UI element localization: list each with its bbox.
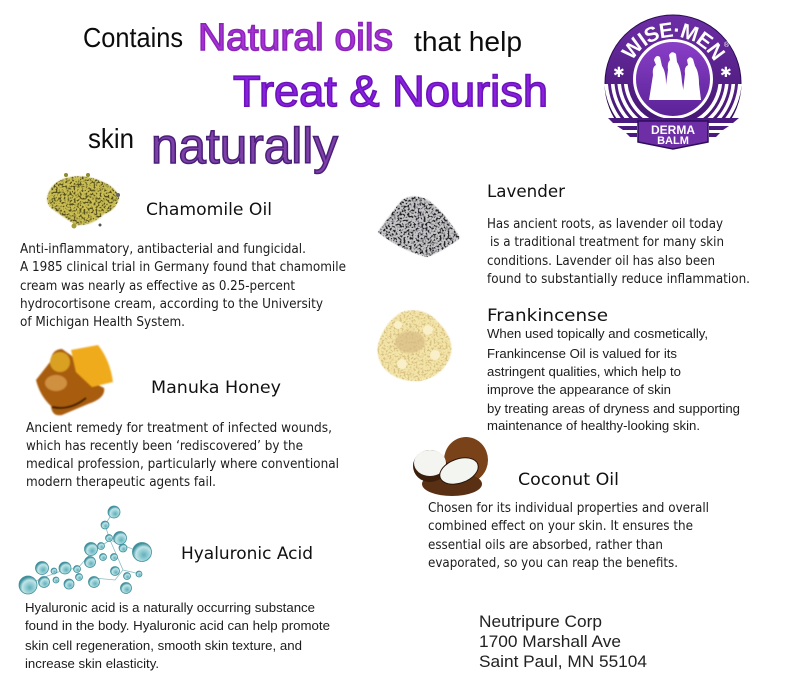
logo: Wise Men Derma Balm: ✱ xyxy=(720,65,732,81)
panel: lavender xyxy=(378,182,750,287)
text block: A 1985 clinical trial in Germany found that chamomile xyxy=(20,260,346,275)
text block: astringent qualities, which help to xyxy=(487,365,681,379)
panel: frankincense xyxy=(378,306,740,433)
text block: Has ancient roots, as lavender oil today xyxy=(487,217,723,232)
text block xyxy=(487,217,750,287)
heading: Frankincense xyxy=(487,306,608,326)
text block: When used topically and cosmetically, xyxy=(487,327,708,341)
address: 1700 Marshall Ave xyxy=(479,633,621,651)
text block: increase skin elasticity. xyxy=(25,657,159,671)
title: Natural oils xyxy=(198,17,393,59)
text block: Ancient remedy for treatment of infected wounds, xyxy=(26,421,332,436)
title: Treat & Nourish xyxy=(233,67,548,116)
text block: Hyaluronic acid is a naturally occurring substance xyxy=(25,601,315,615)
icon: molecule xyxy=(19,506,152,594)
icon: chamomile flowers xyxy=(47,173,120,228)
text block: of Michigan Health System. xyxy=(20,315,185,330)
text block xyxy=(20,242,346,330)
text block: essential oils are absorbed, rather than xyxy=(428,538,663,553)
text block: modern therapeutic agents fail. xyxy=(26,475,216,490)
title: that help xyxy=(414,26,522,57)
heading: Coconut Oil xyxy=(518,470,619,490)
address: Neutripure Corp xyxy=(479,613,602,631)
logo: Wise Men Derma Balm: ® xyxy=(724,41,730,49)
text block: Chosen for its individual properties and overall xyxy=(428,501,709,516)
panel: hyaluronic acid xyxy=(19,506,330,671)
icon: honeycomb xyxy=(36,345,113,415)
logo: Wise Men Derma Balm: ✱ xyxy=(613,65,625,81)
title: skin xyxy=(88,123,134,154)
text block: cream was nearly as effective as 0.25-percent xyxy=(20,279,295,294)
text block xyxy=(25,601,330,671)
panel: manuka honey xyxy=(26,345,339,490)
text block: medical profession, particularly where conventional xyxy=(26,457,339,472)
text block: maintenance of healthy-looking skin. xyxy=(487,419,700,433)
icon: lavender pile xyxy=(378,196,460,257)
text block: improve the appearance of skin xyxy=(487,383,671,397)
text block: found in the body. Hyaluronic acid can help promote xyxy=(25,619,330,633)
text block: conditions. Lavender oil has also been xyxy=(487,254,715,269)
panel: chamomile oil xyxy=(20,173,346,330)
address: Saint Paul, MN 55104 xyxy=(479,653,647,671)
logo: Wise Men Derma Balm: DERMA xyxy=(651,123,695,137)
text block xyxy=(26,421,339,490)
text block: which has recently been ‘rediscovered’ by the xyxy=(26,439,303,454)
heading: Hyaluronic Acid xyxy=(181,544,313,564)
panel: coconut oil xyxy=(413,437,709,571)
text block: skin cell regeneration, smooth skin texture, and xyxy=(25,639,302,653)
text block: evaporated, so you can reap the benefits. xyxy=(428,556,678,571)
icon: coconut xyxy=(413,437,488,496)
text block: Anti-inflammatory, antibacterial and fungicidal. xyxy=(20,242,306,257)
text block: by treating areas of dryness and supporting xyxy=(487,402,740,416)
title: Contains xyxy=(83,22,183,53)
heading: Lavender xyxy=(487,182,565,202)
logo: Wise Men Derma Balm: BALM xyxy=(657,135,689,147)
icon: frankincense resin xyxy=(378,310,451,381)
text block: Frankincense Oil is valued for its xyxy=(487,347,677,361)
text block xyxy=(487,327,740,433)
text block xyxy=(428,501,709,571)
address xyxy=(479,613,647,671)
heading: Manuka Honey xyxy=(151,378,281,398)
text block: found to substantially reduce inflammation. xyxy=(487,272,750,287)
logo: Wise Men Derma Balm: WISE·MEN xyxy=(620,22,726,61)
heading: Chamomile Oil xyxy=(146,200,272,220)
text block: hydrocortisone cream, according to the University xyxy=(20,297,323,312)
logo: Wise Men Derma Balm xyxy=(604,14,742,150)
text block: combined effect on your skin. It ensures the xyxy=(428,519,693,534)
text block: is a traditional treatment for many skin xyxy=(490,235,724,250)
title xyxy=(83,17,548,174)
title: naturally xyxy=(151,118,338,174)
